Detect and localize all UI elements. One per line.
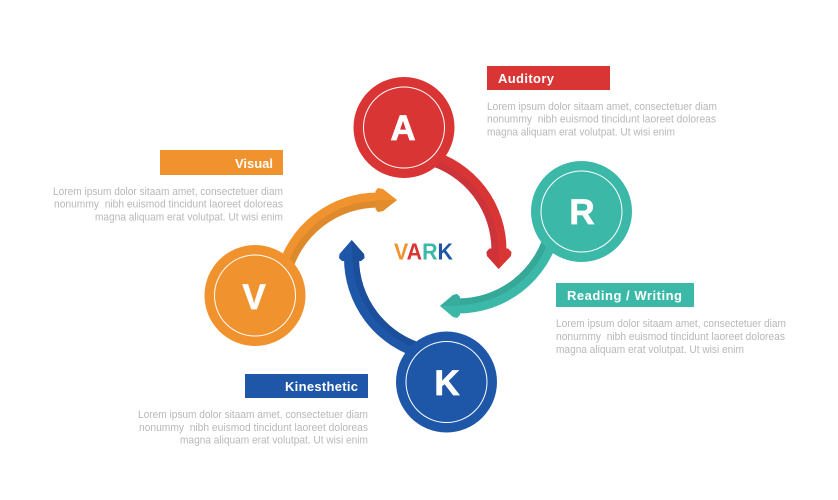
center title: VARK: VARK bbox=[394, 238, 453, 264]
circle: V bbox=[204, 245, 306, 346]
panel: kinesthetic: nonummy nibh euismod tincidunt laoreet doloreas bbox=[139, 422, 368, 434]
panel: reading / writing: Reading / Writing bbox=[567, 288, 682, 303]
circle: R: R bbox=[569, 193, 595, 232]
panel: reading / writing: Lorem ipsum dolor sitaam amet, consectetuer diam bbox=[556, 318, 786, 330]
panel: kinesthetic: Kinesthetic bbox=[285, 379, 358, 394]
panel: auditory: nonummy nibh euismod tincidunt laoreet doloreas bbox=[487, 114, 716, 126]
panel: kinesthetic: magna aliquam erat volutpat. Ut wisi enim bbox=[180, 434, 368, 446]
panel: auditory: Lorem ipsum dolor sitaam amet, consectetuer diam bbox=[487, 101, 717, 113]
panel: reading / writing bbox=[556, 283, 786, 356]
panel: kinesthetic: Lorem ipsum dolor sitaam amet, consectetuer diam bbox=[138, 409, 368, 421]
circle: V: V bbox=[242, 278, 266, 317]
circle: A: A bbox=[390, 109, 416, 148]
circle: K: K bbox=[434, 364, 460, 403]
arrow: visual to auditory bbox=[284, 188, 397, 275]
panel: auditory bbox=[487, 66, 717, 138]
panel: visual: Visual bbox=[235, 156, 273, 171]
arrow: reading to kinesthetic bbox=[440, 231, 552, 318]
panel: kinesthetic bbox=[138, 374, 368, 446]
circle: R bbox=[531, 161, 632, 262]
panel: reading / writing: magna aliquam erat volutpat. Ut wisi enim bbox=[556, 344, 744, 356]
arrow: kinesthetic to visual bbox=[339, 240, 424, 352]
panel: reading / writing: nonummy nibh euismod tincidunt laoreet doloreas bbox=[556, 331, 785, 343]
circle: A bbox=[354, 77, 454, 178]
panel: visual: magna aliquam erat volutpat. Ut wisi enim bbox=[95, 212, 283, 224]
panel: auditory: magna aliquam erat volutpat. Ut wisi enim bbox=[487, 126, 675, 138]
arrow: auditory to reading bbox=[426, 157, 512, 269]
panel: visual bbox=[53, 150, 283, 224]
panel: auditory: Auditory bbox=[498, 71, 555, 86]
panel: visual: Lorem ipsum dolor sitaam amet, consectetuer diam bbox=[53, 186, 283, 198]
panel: visual: nonummy nibh euismod tincidunt laoreet doloreas bbox=[54, 198, 283, 210]
circle: K bbox=[396, 332, 497, 432]
